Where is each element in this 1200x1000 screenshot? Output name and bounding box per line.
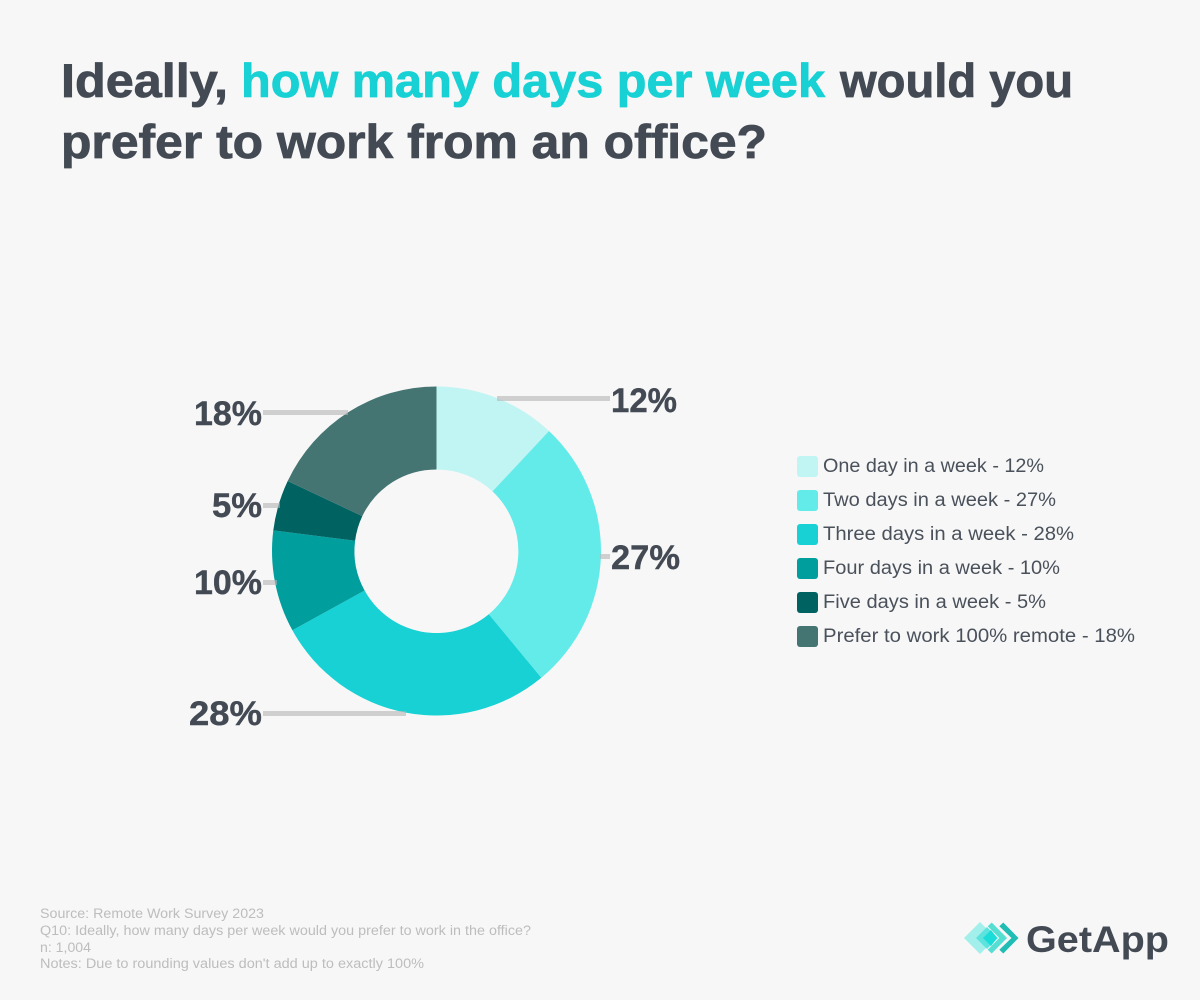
source notes: n: 1,004 xyxy=(40,940,92,955)
source notes: Notes: Due to rounding values don't add up to exactly 100% xyxy=(40,956,424,971)
title xyxy=(61,54,1073,168)
title: prefer to work from an office? xyxy=(61,115,767,168)
percentage labels: 18% xyxy=(194,395,262,433)
slice: two days 27% xyxy=(489,431,601,678)
legend item: four days: Four days in a week - 10% xyxy=(823,558,1060,579)
source notes xyxy=(40,906,531,971)
percentage labels: 27% xyxy=(611,539,680,577)
source notes: Q10: Ideally, how many days per week would you prefer to work in the office? xyxy=(40,923,531,938)
legend item: three days: Three days in a week - 28% xyxy=(823,524,1074,545)
percentage labels: 5% xyxy=(212,487,262,525)
title: Ideally, xyxy=(61,54,228,107)
slice: five days 5% xyxy=(273,481,362,541)
slice: one day 12% xyxy=(436,386,549,491)
GetApp logo xyxy=(964,919,1169,960)
title: how many days per week xyxy=(241,54,826,107)
title: would you xyxy=(839,54,1073,107)
slice: three days 28% xyxy=(292,590,541,715)
legend xyxy=(797,456,1135,647)
donut chart xyxy=(272,386,601,715)
legend item: five days: Five days in a week - 5% xyxy=(823,592,1046,613)
percentage labels: 12% xyxy=(611,382,677,420)
leader lines xyxy=(263,396,610,716)
logo wordmark: GetApp xyxy=(1026,919,1169,960)
slice: remote 18% xyxy=(288,386,436,516)
legend item: remote: Prefer to work 100% remote - 18% xyxy=(823,626,1135,647)
slice: four days 10% xyxy=(272,530,365,630)
legend item: two days: Two days in a week - 27% xyxy=(823,490,1056,511)
percentage labels: 28% xyxy=(189,695,262,733)
source notes: Source: Remote Work Survey 2023 xyxy=(40,906,264,921)
percentage labels xyxy=(189,382,680,733)
percentage labels: 10% xyxy=(194,564,262,602)
legend item: one day: One day in a week - 12% xyxy=(823,456,1044,477)
icon: logo diamonds xyxy=(964,922,1018,954)
